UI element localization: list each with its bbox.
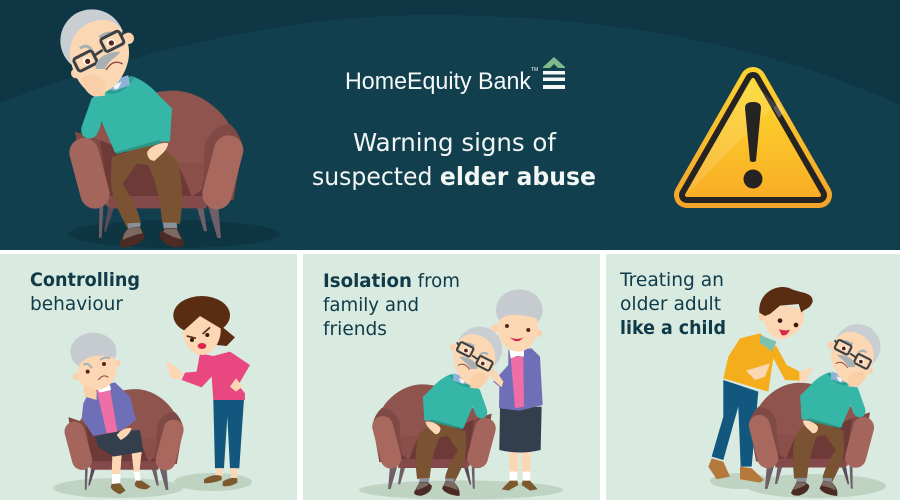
caption: behaviour: [30, 293, 123, 315]
caption: [30, 269, 140, 315]
caption: Isolation from: [323, 270, 460, 292]
panel: header: [0, 0, 900, 250]
panel background: [303, 254, 600, 500]
illustration: chair: [75, 91, 243, 238]
title: [312, 128, 596, 191]
floor shadow: [68, 220, 280, 248]
panel: treating like a child: [606, 254, 900, 500]
caption: Treating an: [619, 269, 724, 291]
illustration: chair: [373, 384, 492, 489]
caption: like a child: [620, 317, 726, 339]
header background: [0, 0, 900, 250]
logo: [345, 57, 565, 95]
illustration: chair: [749, 383, 870, 489]
floor shadow: [359, 480, 563, 500]
caption: Controlling: [30, 269, 140, 291]
icon: warning triangle: [685, 80, 819, 196]
panel background: [606, 254, 900, 500]
illustration: older man seated: [414, 327, 502, 496]
floor shadows: [53, 473, 252, 498]
title: suspected elder abuse: [312, 162, 596, 191]
header arch: [0, 15, 900, 250]
illustration: older woman seated: [70, 333, 151, 494]
panel background: [0, 254, 297, 500]
panel: isolation: [303, 254, 600, 500]
title: Warning signs of: [353, 128, 557, 157]
illustration: chair: [68, 389, 183, 490]
illustration: older man seated: [791, 324, 881, 496]
illustration: older woman standing: [490, 289, 543, 491]
illustration: older man seated: [60, 9, 185, 248]
caption: older adult: [620, 293, 721, 315]
caption: friends: [323, 318, 387, 340]
floor shadows: [710, 473, 886, 498]
caption: [323, 270, 460, 340]
logo: TM: [531, 67, 538, 73]
illustration: angry woman pointing: [166, 296, 250, 486]
caption: [619, 269, 726, 339]
panel: controlling behaviour: [0, 254, 297, 500]
logo: HomeEquity Bank: [345, 68, 532, 95]
illustration: younger man leaning: [708, 287, 813, 483]
caption: family and: [323, 294, 419, 316]
